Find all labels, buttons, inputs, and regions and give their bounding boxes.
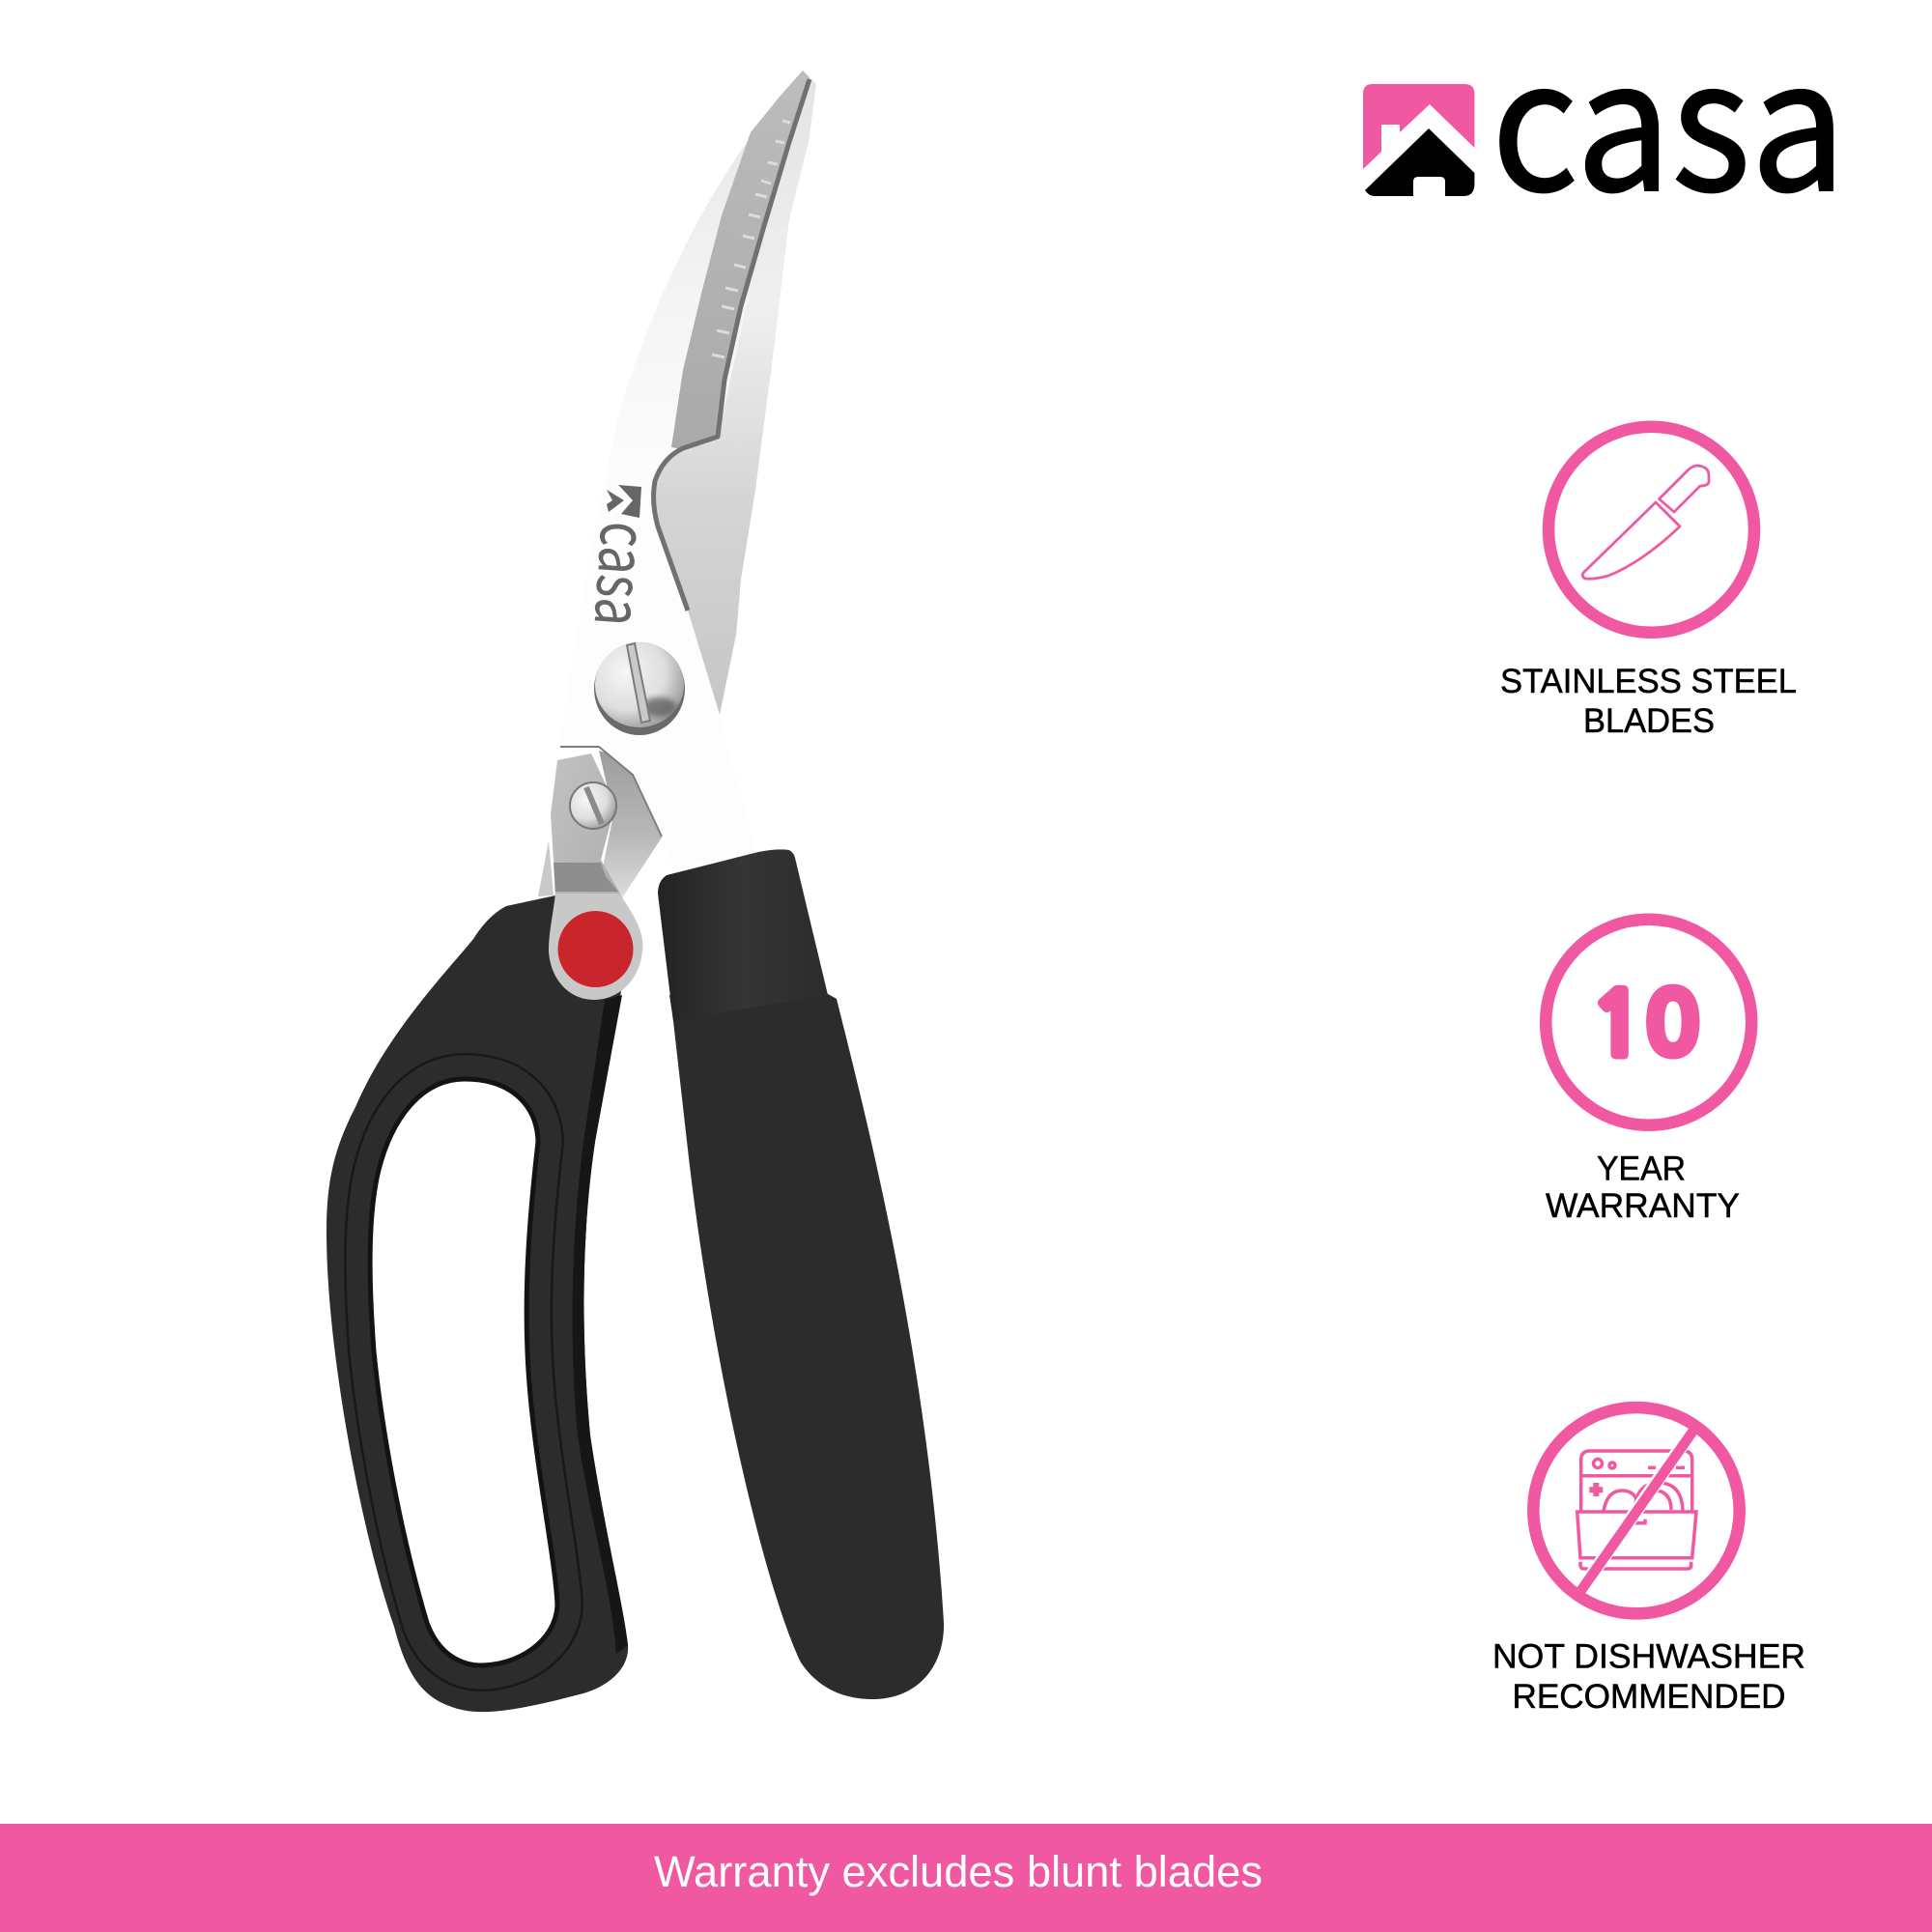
label: not dishwasher recommended: [1492, 1636, 1805, 1716]
icon: 10 in circle: [1546, 920, 1751, 1125]
feature: not dishwasher recommended: [1492, 1407, 1805, 1716]
large pivot screw: [594, 642, 685, 735]
product photo: kitchen scissors: [327, 71, 944, 1712]
label: stainless steel blades: STAINLESS STEEL: [1500, 662, 1797, 700]
latch plate fold: [554, 863, 618, 892]
handle finger hole: [370, 1079, 557, 1665]
label: year warranty: YEAR: [1597, 1150, 1686, 1188]
handle ridge: [370, 1079, 557, 1665]
inner cutting blade: [599, 751, 662, 896]
red rivet button: [558, 911, 634, 987]
handle outer groove: [370, 1079, 557, 1665]
engraved wordmark: casa: [576, 519, 675, 630]
textured handle collar: [658, 849, 828, 1021]
feature: 10 year warranty: [1546, 920, 1751, 1225]
footer band: warranty note: [0, 1824, 1932, 1932]
handle pivot sliver: [538, 840, 554, 896]
logo mark: black house: [1365, 128, 1474, 196]
label: year warranty: [1546, 1150, 1740, 1225]
icon: 10 in circle: 10: [1590, 982, 1700, 1068]
blade cut-edge shadow: [654, 79, 810, 611]
label: stainless steel blades: [1500, 662, 1797, 740]
label: not dishwasher recommended: RECOMMENDED: [1513, 1677, 1785, 1716]
left black loop handle: [327, 895, 628, 1712]
blade logo roof panel: [618, 485, 641, 518]
icon: knife in circle: [1548, 427, 1754, 633]
right black sleeve handle: [669, 990, 944, 1699]
brand logo: [1363, 0, 1846, 242]
rear blade and right edge: [650, 71, 816, 715]
label: year warranty: WARRANTY: [1546, 1186, 1740, 1225]
label: stainless steel blades: BLADES: [1583, 701, 1715, 740]
small screw: [570, 782, 616, 829]
handle dark edge strip: [573, 995, 628, 1654]
pivot plate around rivet: [549, 894, 642, 1000]
icon: crossed-out dishwasher: [1533, 1407, 1740, 1613]
footer band: warranty note: Warranty excludes blunt blades: [654, 1847, 1263, 1896]
blade logo house: [607, 490, 624, 512]
feature: stainless steel blades: [1500, 427, 1797, 740]
front serrated blade: [671, 71, 810, 449]
latch plate: [551, 753, 623, 901]
label: not dishwasher recommended: NOT DISHWASHER: [1492, 1636, 1805, 1675]
front blade white face: [560, 71, 810, 869]
serration marks: [712, 121, 790, 357]
blade step outline: [560, 747, 662, 837]
engraved blade logo: [576, 485, 675, 630]
logo mark: pink roof panel: [1363, 84, 1474, 169]
